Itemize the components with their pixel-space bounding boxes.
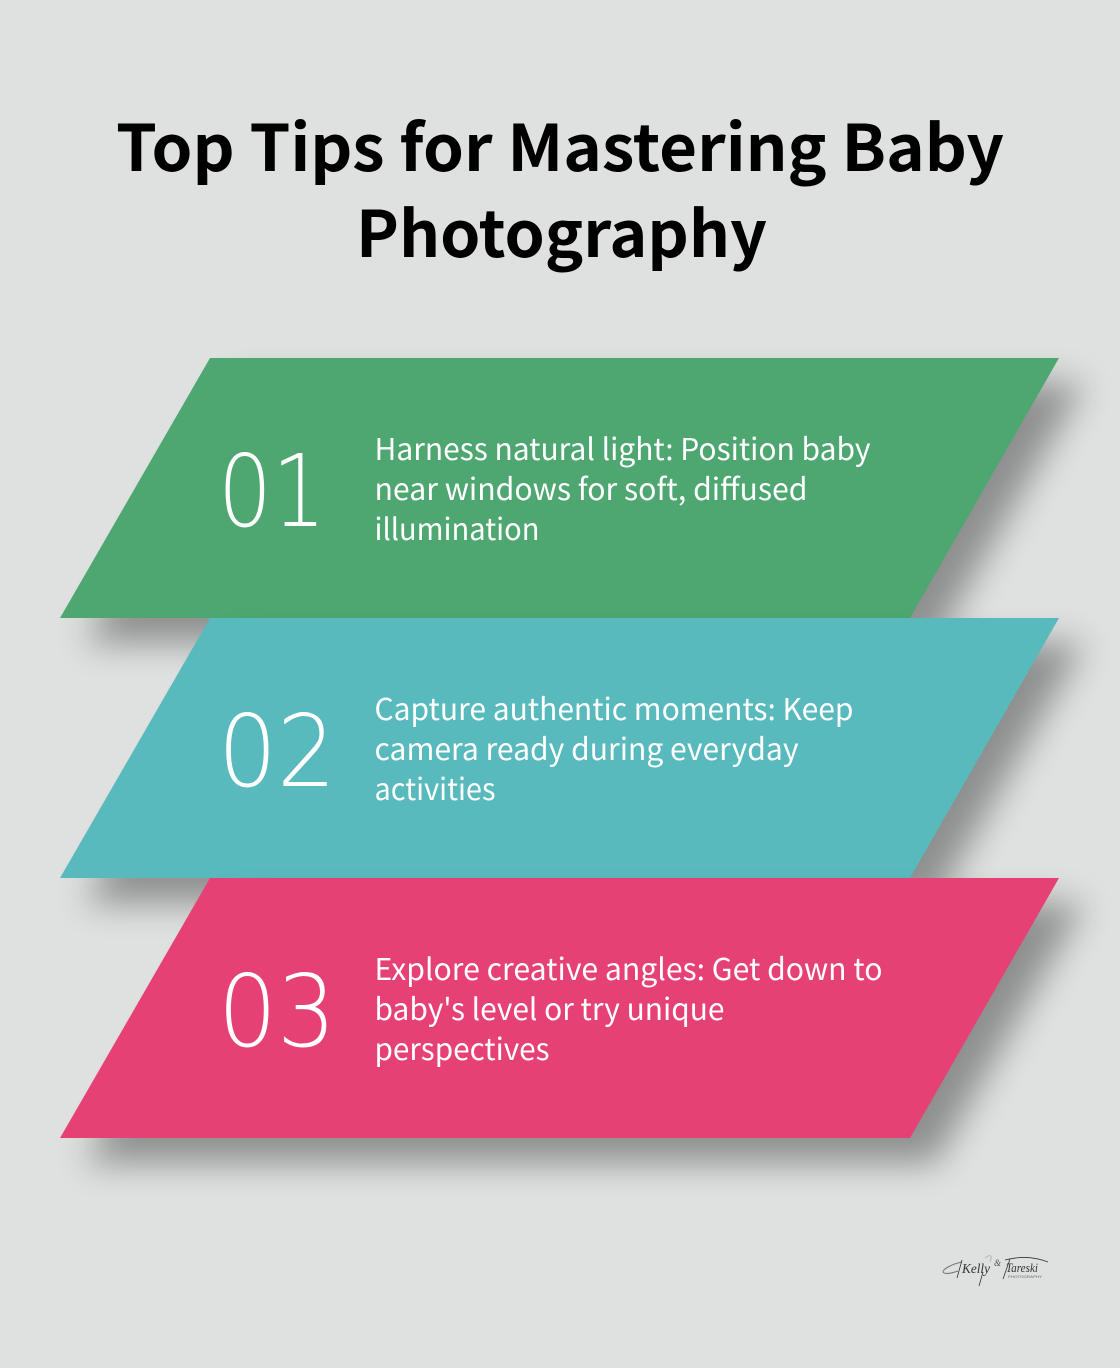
title: Top Tips for Mastering Baby xyxy=(116,98,1004,190)
tip 1 text: illumination xyxy=(374,505,540,549)
tip 2 number: 02 xyxy=(218,693,336,810)
logo: signature: & xyxy=(994,1258,1001,1268)
tip 2 text xyxy=(374,685,854,809)
logo: signature: Tareski xyxy=(1006,1260,1038,1275)
tip 1 banner xyxy=(60,358,1059,618)
tip 2 text: activities xyxy=(374,765,496,809)
tip 1 number: 01 xyxy=(218,433,326,550)
tip 2 banner xyxy=(60,618,1059,878)
tip 3 banner xyxy=(60,878,1059,1138)
tip 3 text: baby's level or try unique xyxy=(374,985,724,1029)
title: Photography xyxy=(356,184,767,276)
logo: signature: PHOTOGRAPHY xyxy=(1008,1275,1043,1279)
tip 3 text: Explore creative angles: Get down to xyxy=(374,945,882,989)
panel: tip 1 xyxy=(60,358,1084,643)
tip 1 text xyxy=(374,425,871,549)
tip 1 text: Harness natural light: Position baby xyxy=(374,425,871,469)
tip 3 number: 03 xyxy=(218,953,336,1070)
tip 2 text: camera ready during everyday xyxy=(374,725,799,769)
logo: signature xyxy=(943,1256,1048,1286)
logo: signature: Kelly xyxy=(961,1262,991,1277)
panel: tip 2 xyxy=(60,618,1084,903)
tip 1 text: near windows for soft, diffused xyxy=(374,465,808,509)
tip 3 text xyxy=(374,945,882,1069)
tip 2 text: Capture authentic moments: Keep xyxy=(374,685,854,729)
tip 3 text: perspectives xyxy=(374,1025,550,1069)
panel: tip 3 xyxy=(60,878,1084,1163)
title xyxy=(116,98,1004,276)
